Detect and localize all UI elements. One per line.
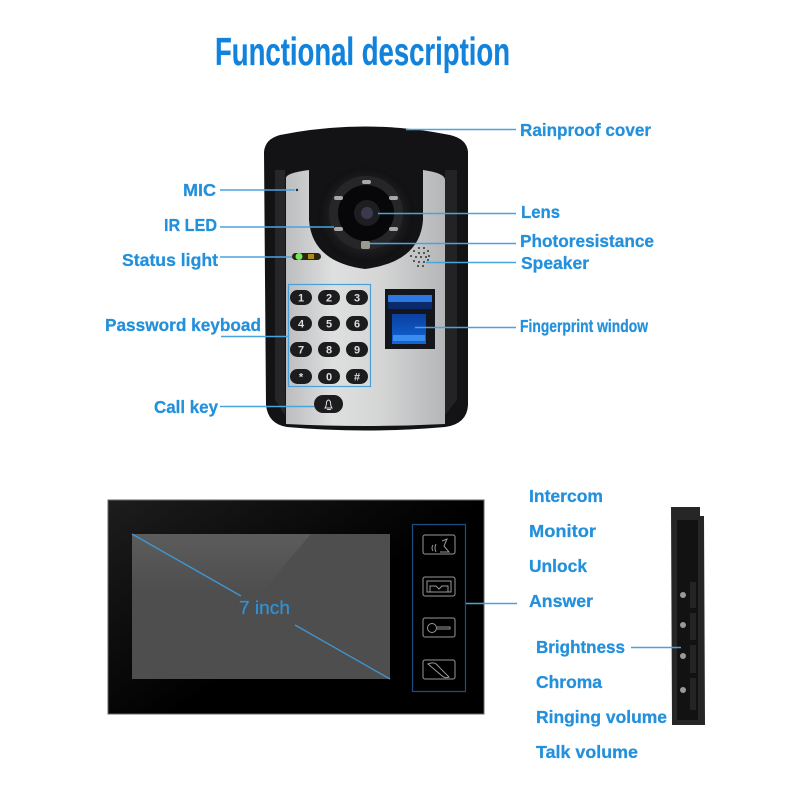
mic hole: [296, 189, 298, 191]
IR LEDs: [334, 180, 398, 231]
side button labels: Talk volume: [536, 742, 638, 762]
leader lines: door station: [220, 130, 516, 406]
rainproof cover: [264, 126, 468, 430]
door station unit: [264, 126, 468, 430]
fingerprint window: [385, 289, 435, 349]
side button labels: [536, 637, 667, 762]
door station labels: Fingerprint window: [520, 316, 648, 336]
camera ring: [318, 167, 414, 263]
indoor monitor: [108, 500, 484, 714]
door station labels: [105, 120, 654, 417]
answer leader line: [466, 602, 517, 604]
door station labels: Password keyboad: [105, 315, 261, 335]
photoresistance: [361, 241, 370, 249]
side button labels: Chroma: [536, 672, 602, 692]
unlock button: [423, 618, 455, 637]
keypad: 0: [326, 372, 332, 384]
keypad: 5: [326, 318, 332, 330]
door station labels: MIC: [183, 180, 216, 200]
keypad: [288, 284, 370, 386]
monitor button labels: Answer: [529, 591, 593, 611]
monitor button labels: Intercom: [529, 486, 603, 506]
door station labels: Photoresistance: [520, 231, 654, 251]
screen: [132, 534, 390, 679]
metal face plate: [286, 170, 445, 426]
door station labels: Speaker: [521, 253, 589, 273]
lens: [354, 200, 380, 226]
keypad: #: [354, 372, 360, 384]
speaker holes: [410, 247, 430, 267]
monitor button labels: Unlock: [529, 556, 587, 576]
keypad: 7: [298, 344, 304, 356]
side button labels: Brightness: [536, 637, 625, 657]
keypad: 8: [326, 344, 332, 356]
door station labels: Status light: [122, 250, 218, 270]
monitor side view: [671, 507, 705, 725]
screen diagonal: [132, 534, 390, 679]
brightness leader line: [631, 646, 681, 648]
intercom button: [423, 535, 455, 554]
door station labels: Call key: [154, 397, 218, 417]
monitor button labels: [529, 486, 603, 611]
call key: [314, 395, 343, 413]
button panel: [412, 524, 466, 692]
keypad: 1: [298, 292, 304, 304]
screen size label: 7 inch: [239, 597, 290, 618]
monitor button: [423, 577, 455, 596]
door station labels: Rainproof cover: [520, 120, 651, 140]
side button labels: Ringing volume: [536, 707, 667, 727]
door station labels: Lens: [521, 202, 560, 222]
keypad: 3: [354, 292, 360, 304]
monitor button labels: Monitor: [529, 521, 596, 541]
keypad: 2: [326, 292, 332, 304]
keypad: *: [299, 372, 304, 384]
keypad: 9: [354, 344, 360, 356]
status light: [292, 253, 321, 260]
answer button: [423, 660, 455, 679]
keypad: 6: [354, 318, 360, 330]
keypad: 4: [298, 318, 305, 330]
door station labels: IR LED: [164, 215, 217, 235]
title: Functional description: [215, 31, 510, 74]
